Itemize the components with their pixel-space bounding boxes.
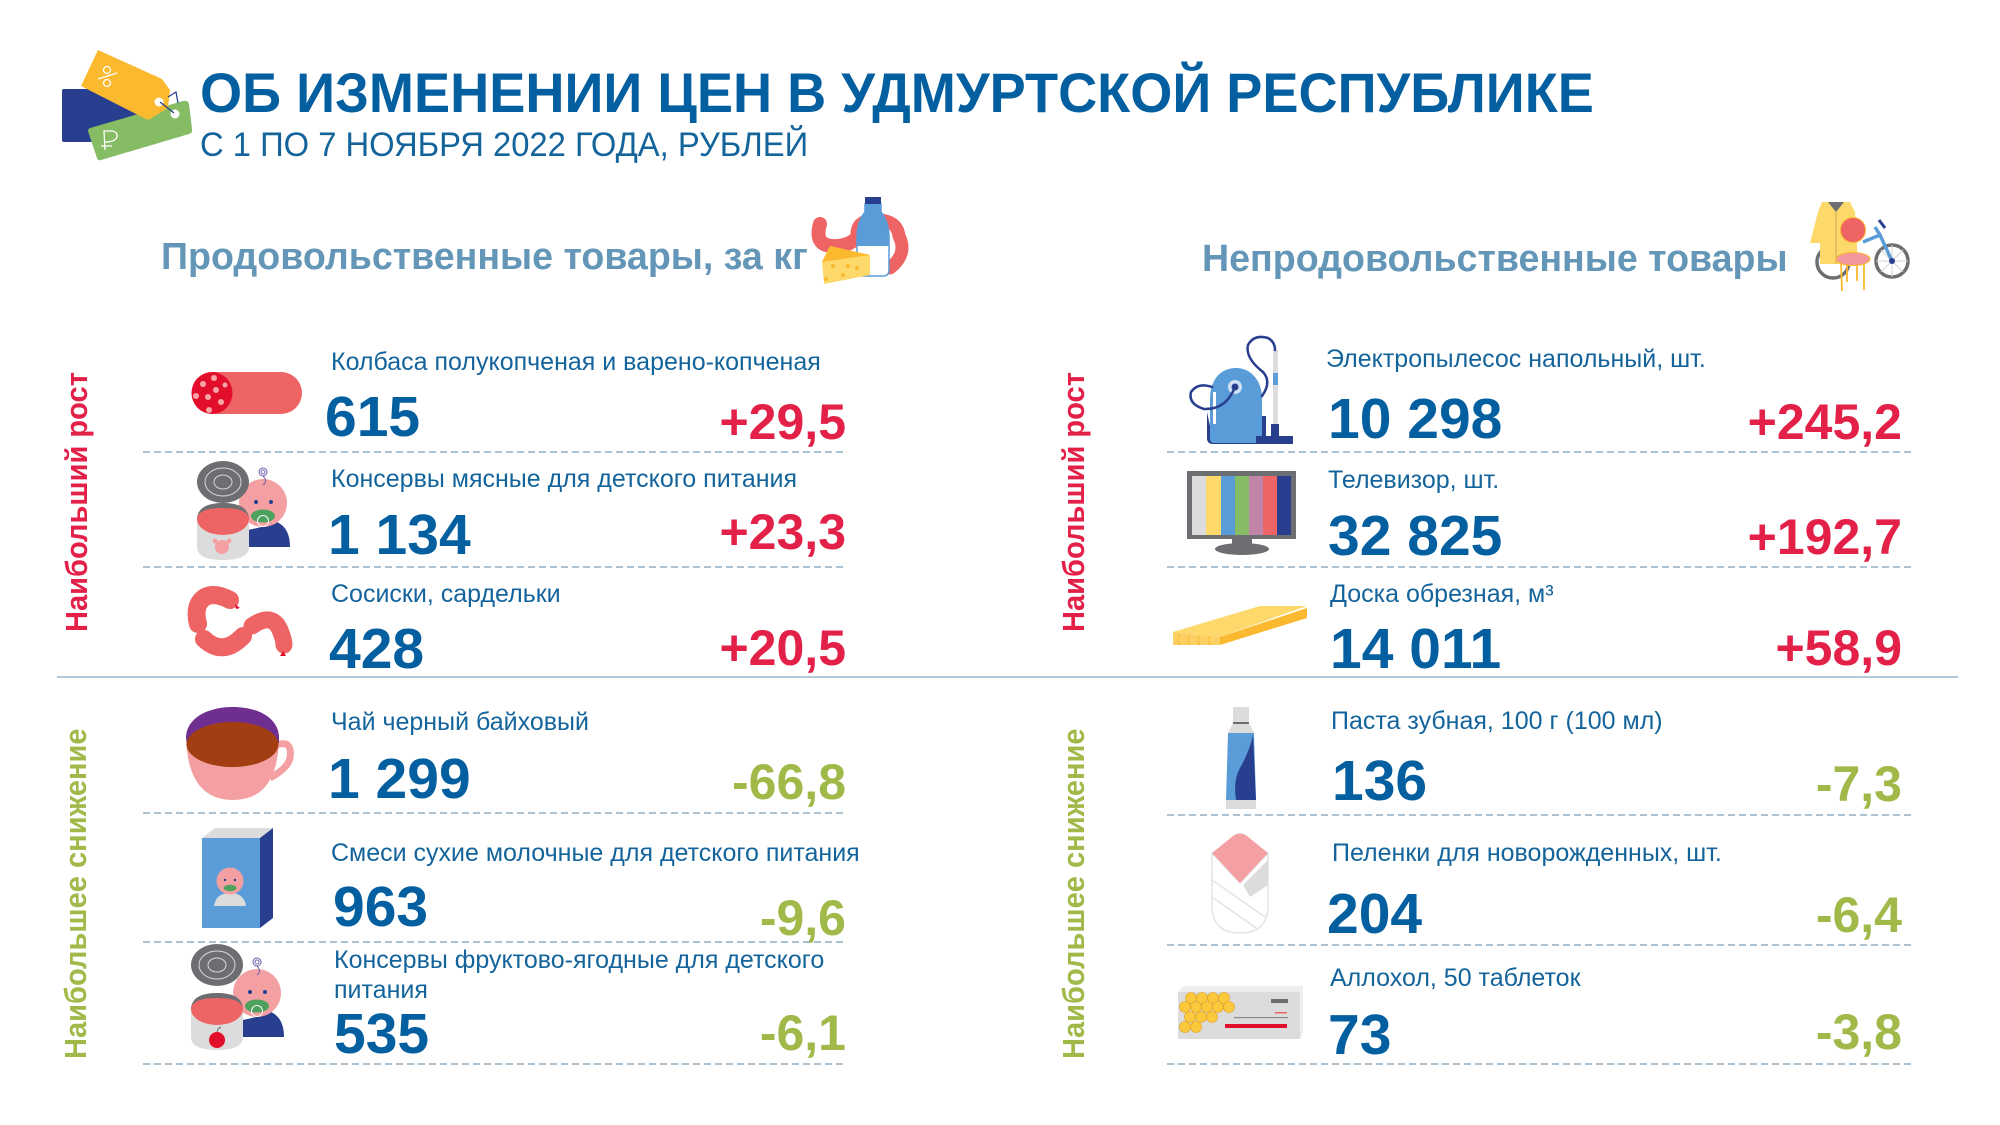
change: +192,7	[1748, 509, 1902, 565]
icon: television	[1187, 471, 1296, 555]
row: baby formula: Смеси сухие молочные для детского питания	[331, 839, 860, 867]
row: diapers: Пеленки для новорожденных, шт.	[1332, 839, 1722, 867]
icon: milk formula box	[202, 828, 273, 928]
price: 428	[329, 617, 424, 681]
price: 1 299	[328, 747, 471, 811]
row: allochol: Аллохол, 50 таблеток	[1330, 964, 1582, 992]
icon: canned meat and baby	[197, 461, 290, 560]
icon: sausages	[197, 595, 286, 656]
icon: vacuum cleaner	[1191, 337, 1293, 444]
change: +29,5	[719, 394, 846, 450]
row: sausages: Сосиски, сардельки	[331, 580, 561, 608]
change: +20,5	[719, 620, 846, 676]
row: tea: Чай черный байховый	[331, 708, 589, 736]
price: 32 825	[1328, 504, 1502, 568]
change: -9,6	[760, 890, 846, 946]
panel: non-food goods	[1057, 337, 1912, 1067]
title: ОБ ИЗМЕНЕНИИ ЦЕН В УДМУРТСКОЙ РЕСПУБЛИКЕ	[200, 60, 1594, 124]
subtitle: С 1 ПО 7 НОЯБРЯ 2022 ГОДА, РУБЛЕЙ	[200, 125, 808, 164]
row: canned fruit: питания	[334, 976, 428, 1004]
row: TV: Телевизор, шт.	[1328, 466, 1499, 494]
row: canned fruit: Консервы фруктово-ягодные для детского	[334, 946, 824, 974]
icon: toothpaste	[1226, 707, 1256, 809]
change: -6,1	[760, 1005, 846, 1061]
price: 963	[333, 875, 428, 939]
label: largest growth, food: Наибольший рост	[60, 372, 94, 632]
row: baby canned meat: Консервы мясные для детского питания	[331, 465, 797, 493]
change: -6,4	[1816, 887, 1902, 943]
price: 14 011	[1330, 617, 1501, 681]
price: 136	[1332, 749, 1427, 813]
price: 10 298	[1328, 387, 1502, 451]
icon: salami	[192, 372, 302, 414]
icon: price tags	[62, 50, 192, 160]
price: 615	[325, 385, 420, 449]
change: -66,8	[732, 754, 846, 810]
label: largest growth, non-food: Наибольший рост	[1057, 372, 1091, 632]
icon: tea cup	[186, 707, 290, 800]
price: 1 134	[328, 503, 471, 567]
panel: food goods	[59, 348, 860, 1066]
row: sausage: Колбаса полукопченая и варено-копченая	[331, 348, 821, 376]
row: toothpaste: Паста зубная, 100 г (100 мл)	[1331, 707, 1663, 735]
price: 535	[334, 1002, 429, 1066]
icon: canned fruit and baby	[191, 944, 284, 1050]
icon: coat chair bicycle	[1810, 202, 1908, 291]
label: largest decline, non-food: Наибольшее снижение	[1057, 728, 1091, 1059]
icon: board	[1173, 606, 1307, 645]
price: 204	[1327, 882, 1422, 946]
icon: sausage milk cheese	[818, 197, 902, 284]
icon: allochol box	[1178, 986, 1303, 1039]
change: +245,2	[1748, 394, 1902, 450]
heading: food goods: Продовольственные товары, за кг	[161, 235, 808, 277]
change: +58,9	[1775, 620, 1902, 676]
change: -3,8	[1816, 1004, 1902, 1060]
heading: non-food goods: Непродовольственные товары	[1202, 237, 1788, 279]
row: vacuum: Электропылесос напольный, шт.	[1326, 345, 1706, 373]
change: +23,3	[719, 504, 846, 560]
change: -7,3	[1816, 756, 1902, 812]
price: 73	[1328, 1003, 1391, 1067]
row: board: Доска обрезная, м³	[1330, 580, 1554, 608]
icon: swaddle	[1212, 834, 1268, 933]
label: largest decline, food: Наибольшее снижение	[59, 728, 93, 1059]
